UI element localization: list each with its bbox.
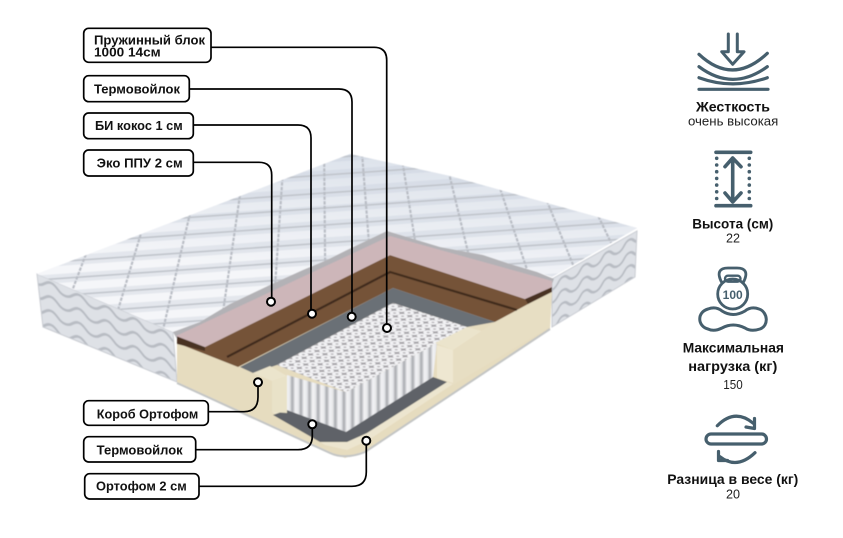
text: max load: 150 — [723, 378, 743, 392]
text: height — [692, 215, 773, 246]
text: weight difference — [667, 471, 798, 501]
spring block right face — [346, 343, 437, 432]
text: height: Высота (см) — [692, 215, 773, 231]
dark line in coir — [227, 272, 517, 357]
text: firmness: Жесткость — [695, 99, 770, 115]
callout: БИ кокос 1 см — [84, 113, 316, 318]
callout: Короб Ортофом: Короб Ортофом — [97, 406, 198, 421]
bottom foam front — [272, 382, 453, 450]
text: height: 22 — [726, 232, 740, 246]
text: max load: Максимальная — [683, 339, 784, 355]
callout: Ортофом 2 см — [85, 437, 370, 499]
callout: Термовойлок верхний — [84, 76, 356, 321]
left foam block — [253, 366, 287, 413]
text: firmness — [688, 99, 778, 129]
callout: Пружинный блок: 1000 14см — [94, 45, 161, 60]
brown coir layer — [177, 255, 552, 367]
spring block left face — [287, 375, 346, 432]
icon: height — [716, 152, 751, 206]
base shadow edge — [177, 329, 550, 456]
text: weight difference: 20 — [726, 487, 740, 501]
callout: Короб Ортофом — [84, 378, 262, 425]
mattress right side panel — [552, 231, 637, 327]
callout: Эко ППУ 2 см: Эко ППУ 2 см — [97, 155, 183, 170]
callout: Термовойлок нижний: Термовойлок — [97, 442, 183, 457]
spring block top — [277, 303, 467, 392]
callout: Пружинный блок — [84, 28, 391, 332]
callout: Термовойлок верхний: Термовойлок — [94, 81, 180, 96]
quilted top surface — [38, 154, 636, 332]
icon: firmness — [699, 34, 768, 89]
text: firmness: очень высокая — [688, 115, 778, 129]
text: weight difference: Разница в весе (кг) — [667, 471, 798, 487]
mattress left side panel — [37, 274, 177, 382]
mattress illustration — [36, 154, 638, 458]
pink eco foam — [176, 236, 552, 347]
callout: Пружинный блок: Пружинный блок — [94, 32, 205, 47]
callout: БИ кокос 1 см: БИ кокос 1 см — [95, 118, 183, 133]
text: max load — [683, 339, 784, 392]
cut rim — [173, 231, 554, 339]
icon: max load: 100 — [723, 288, 743, 302]
icon: weight difference — [706, 416, 766, 462]
callout: Ортофом 2 см: Ортофом 2 см — [96, 479, 187, 494]
foam base and walls — [177, 288, 552, 458]
icon: max load — [700, 268, 766, 330]
right foam block — [435, 292, 552, 385]
thermofelt top — [240, 288, 495, 373]
callout: Эко ППУ 2 см — [84, 150, 275, 306]
dark edge under pink foam — [177, 287, 552, 351]
callout: Термовойлок нижний — [84, 420, 316, 462]
bottom thermofelt — [273, 377, 447, 442]
text: max load: нагрузка (кг) — [688, 358, 777, 374]
